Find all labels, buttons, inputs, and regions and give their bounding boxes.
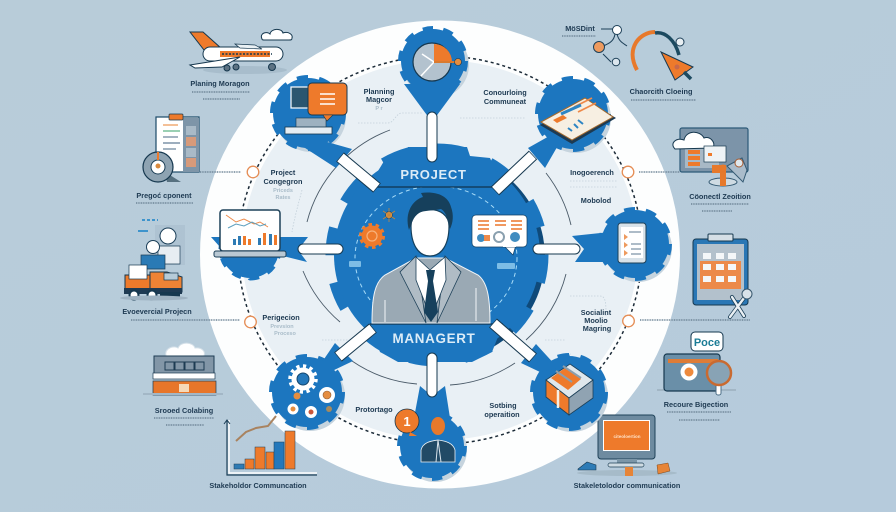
inner label: social: Socialint — [581, 308, 612, 317]
icon: people and truck with label: Evoevercial Projecn — [122, 307, 192, 316]
arrow: right — [538, 244, 575, 254]
banner: PROJECT: PROJECT — [400, 167, 467, 182]
cloud — [261, 29, 292, 40]
banner: PROJECT — [368, 147, 503, 187]
inner label: inogoerench — [570, 168, 614, 205]
arrow: upper left — [340, 157, 377, 188]
chart: bar chart with label: Stakeholdor Communcation — [209, 481, 307, 490]
inner label: consulting: Communeat — [484, 97, 527, 106]
icon: storefront with label: Srooed Colabing — [155, 406, 213, 415]
icon: people and truck with label — [120, 220, 192, 316]
chart: bar chart with label — [209, 416, 317, 490]
gear: cogs lower left — [272, 343, 353, 431]
white central disc — [200, 20, 680, 488]
inner label: sorting: Sotbing — [489, 401, 517, 410]
icon: plane with label — [190, 29, 292, 99]
connector left lower — [131, 316, 256, 328]
icon: plane with label: Planing Moragon — [190, 79, 250, 88]
icon: cursor process nodes with label: Chaorcith Cloeing — [630, 87, 692, 96]
icon: computer and speech bubble — [285, 83, 347, 134]
dashed orbit ring — [238, 56, 642, 444]
inner label: consulting: Conourloing — [483, 88, 527, 97]
icon: orange monitor with label — [574, 415, 680, 490]
inner label: project: Priceds — [273, 188, 293, 194]
gear: person bottom — [395, 386, 467, 482]
icon: checklist and magnifier with label — [136, 114, 199, 203]
connector right upper — [622, 166, 680, 178]
speech bubble with dashboard — [472, 215, 527, 255]
icon: cursor process nodes with label — [562, 24, 696, 100]
inner label: social: Moolio — [584, 316, 608, 325]
inner label: perigecion: Perigecion — [262, 313, 300, 322]
dashed light ring — [355, 186, 517, 330]
inner label: planning: Planning — [364, 87, 394, 96]
gear: box lower right — [521, 344, 608, 432]
connector left upper — [200, 166, 259, 178]
icon: small orange cog — [383, 208, 395, 222]
inner label: inogoerench: Inogoerench — [570, 168, 614, 177]
inner label: perigecion: Proceso — [274, 331, 296, 337]
inner label: perigecion — [262, 313, 300, 337]
small light tag right — [497, 263, 515, 269]
banner: MANAGERT — [370, 324, 503, 362]
inner thin arcs — [303, 130, 571, 385]
central gear — [332, 147, 545, 362]
icon: cloud monitor with label — [673, 128, 751, 211]
gear: laptop left — [211, 210, 308, 278]
inner label: planning: P r — [375, 106, 383, 112]
icon: resource card with label: Recoure Bigection — [664, 400, 728, 409]
connector right lower — [623, 315, 750, 327]
arrow: left — [303, 244, 338, 254]
inner label: planning: Magcor — [366, 95, 392, 104]
gear: upper right — [528, 79, 616, 168]
inner label: project: Project — [271, 168, 296, 177]
small light tag left — [349, 261, 361, 267]
icon: clipboard document — [540, 98, 616, 144]
inner label: perigecion: Prevsion — [270, 324, 294, 330]
icon: resource card with label — [657, 332, 736, 420]
gear: upper left — [273, 78, 352, 168]
inner label: project: Rates — [276, 195, 290, 201]
inner label: project — [264, 168, 302, 201]
inner label: inogoerench: Mobolod — [581, 196, 611, 205]
icon: alert bubble and orange person: 1 — [403, 414, 411, 429]
icon: cursor process nodes with label: MöSDint — [565, 24, 595, 33]
arrow: bottom — [426, 358, 438, 392]
faint dotted decorations — [292, 113, 618, 340]
arrow: top — [426, 117, 438, 157]
icon: orange monitor with label: citeoloertion — [613, 434, 641, 439]
icon: laptop with chart — [214, 210, 286, 257]
gear: tablet right — [572, 210, 672, 282]
icon: tablet — [618, 223, 646, 263]
inner label: sorting — [484, 401, 520, 419]
inner label: consulting — [483, 88, 527, 106]
icon: orange gear — [361, 225, 383, 247]
icon: clipboard with tools — [693, 234, 752, 317]
arrow: lower left — [338, 328, 373, 357]
icon: small gears — [288, 366, 335, 418]
icon: package box — [546, 364, 593, 415]
person — [372, 193, 490, 323]
icon: pie chart — [413, 43, 462, 81]
inner label: project: Congegron — [264, 177, 302, 186]
icon: storefront with label — [143, 343, 223, 425]
banner: MANAGERT: MANAGERT — [393, 331, 476, 346]
icon: cloud monitor with label: Cöonectl Zeoition — [689, 192, 751, 201]
icon: resource card with label: Poce — [694, 337, 720, 349]
gear: planning top — [401, 29, 469, 122]
inner label: sorting: operaition — [484, 410, 520, 419]
inner label: planning — [364, 87, 394, 112]
arrow: lower right — [493, 323, 533, 358]
inner label: social: Magring — [583, 324, 611, 333]
icon: orange monitor with label: Stakeletolodor communication — [574, 481, 680, 490]
inner label: protortago: Protortago — [355, 405, 393, 414]
arrow: upper right — [495, 155, 533, 191]
icon: checklist and magnifier with label: Pregoć cponent — [136, 191, 192, 200]
inner label: social — [581, 308, 612, 333]
